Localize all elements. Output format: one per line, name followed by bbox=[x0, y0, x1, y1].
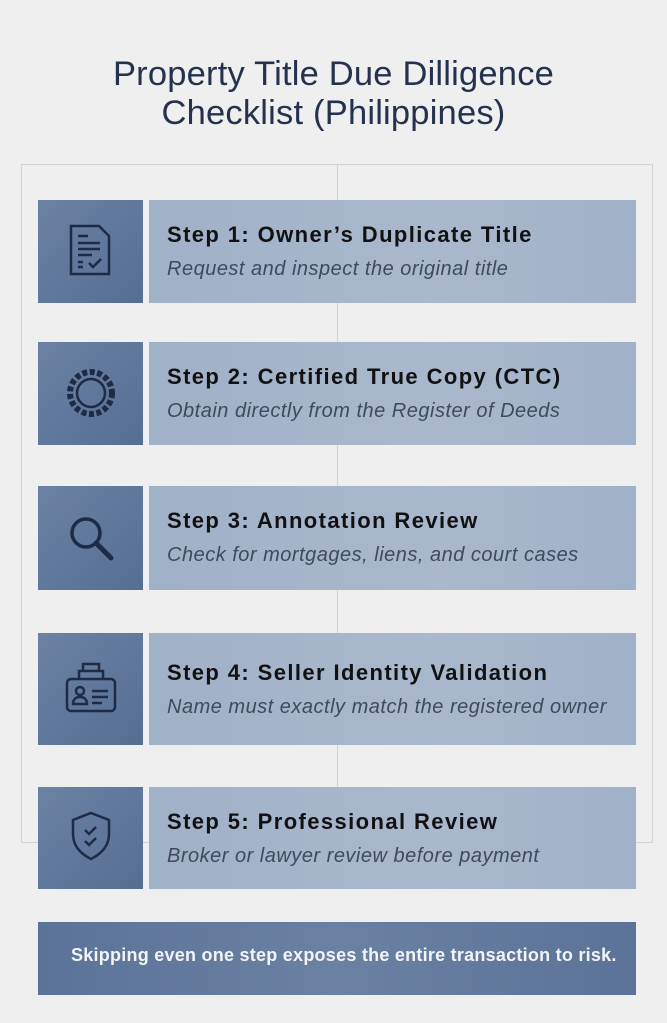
frame bbox=[21, 164, 653, 843]
icon: id card bbox=[38, 633, 143, 745]
text: step 5 bbox=[149, 787, 636, 889]
text: step 5: Step 5: Professional Review bbox=[167, 809, 498, 834]
text: step 2: Step 2: Certified True Copy (CTC) bbox=[167, 364, 562, 389]
title: Property Title Due Dilligence bbox=[113, 55, 554, 93]
callout banner bbox=[38, 922, 636, 995]
title bbox=[113, 55, 554, 132]
text: step 1: Step 1: Owner’s Duplicate Title bbox=[167, 222, 533, 247]
step 1 bbox=[38, 200, 636, 303]
text: step 3 bbox=[149, 486, 636, 590]
step 3 bbox=[38, 486, 636, 590]
callout banner: Skipping even one step exposes the entire transaction to risk. bbox=[71, 945, 617, 965]
text: step 3: Step 3: Annotation Review bbox=[167, 508, 479, 533]
icon: document bbox=[38, 200, 143, 303]
text: step 3: Check for mortgages, liens, and court cases bbox=[167, 544, 579, 566]
text: step 2: Obtain directly from the Register of Deeds bbox=[167, 400, 560, 422]
text: step 4 bbox=[149, 633, 636, 745]
icon: seal bbox=[38, 342, 143, 445]
icon: shield bbox=[38, 787, 143, 889]
text: step 1 bbox=[149, 200, 636, 303]
text: step 5: Broker or lawyer review before payment bbox=[167, 845, 539, 867]
step 4 bbox=[38, 633, 636, 745]
title: Checklist (Philippines) bbox=[162, 94, 505, 132]
text: step 4: Step 4: Seller Identity Validation bbox=[167, 660, 548, 685]
step 5 bbox=[38, 787, 636, 889]
icon: magnifier bbox=[38, 486, 143, 590]
text: step 2 bbox=[149, 342, 636, 445]
step 2 bbox=[38, 342, 636, 445]
text: step 4: Name must exactly match the registered owner bbox=[167, 696, 607, 718]
text: step 1: Request and inspect the original title bbox=[167, 258, 508, 280]
